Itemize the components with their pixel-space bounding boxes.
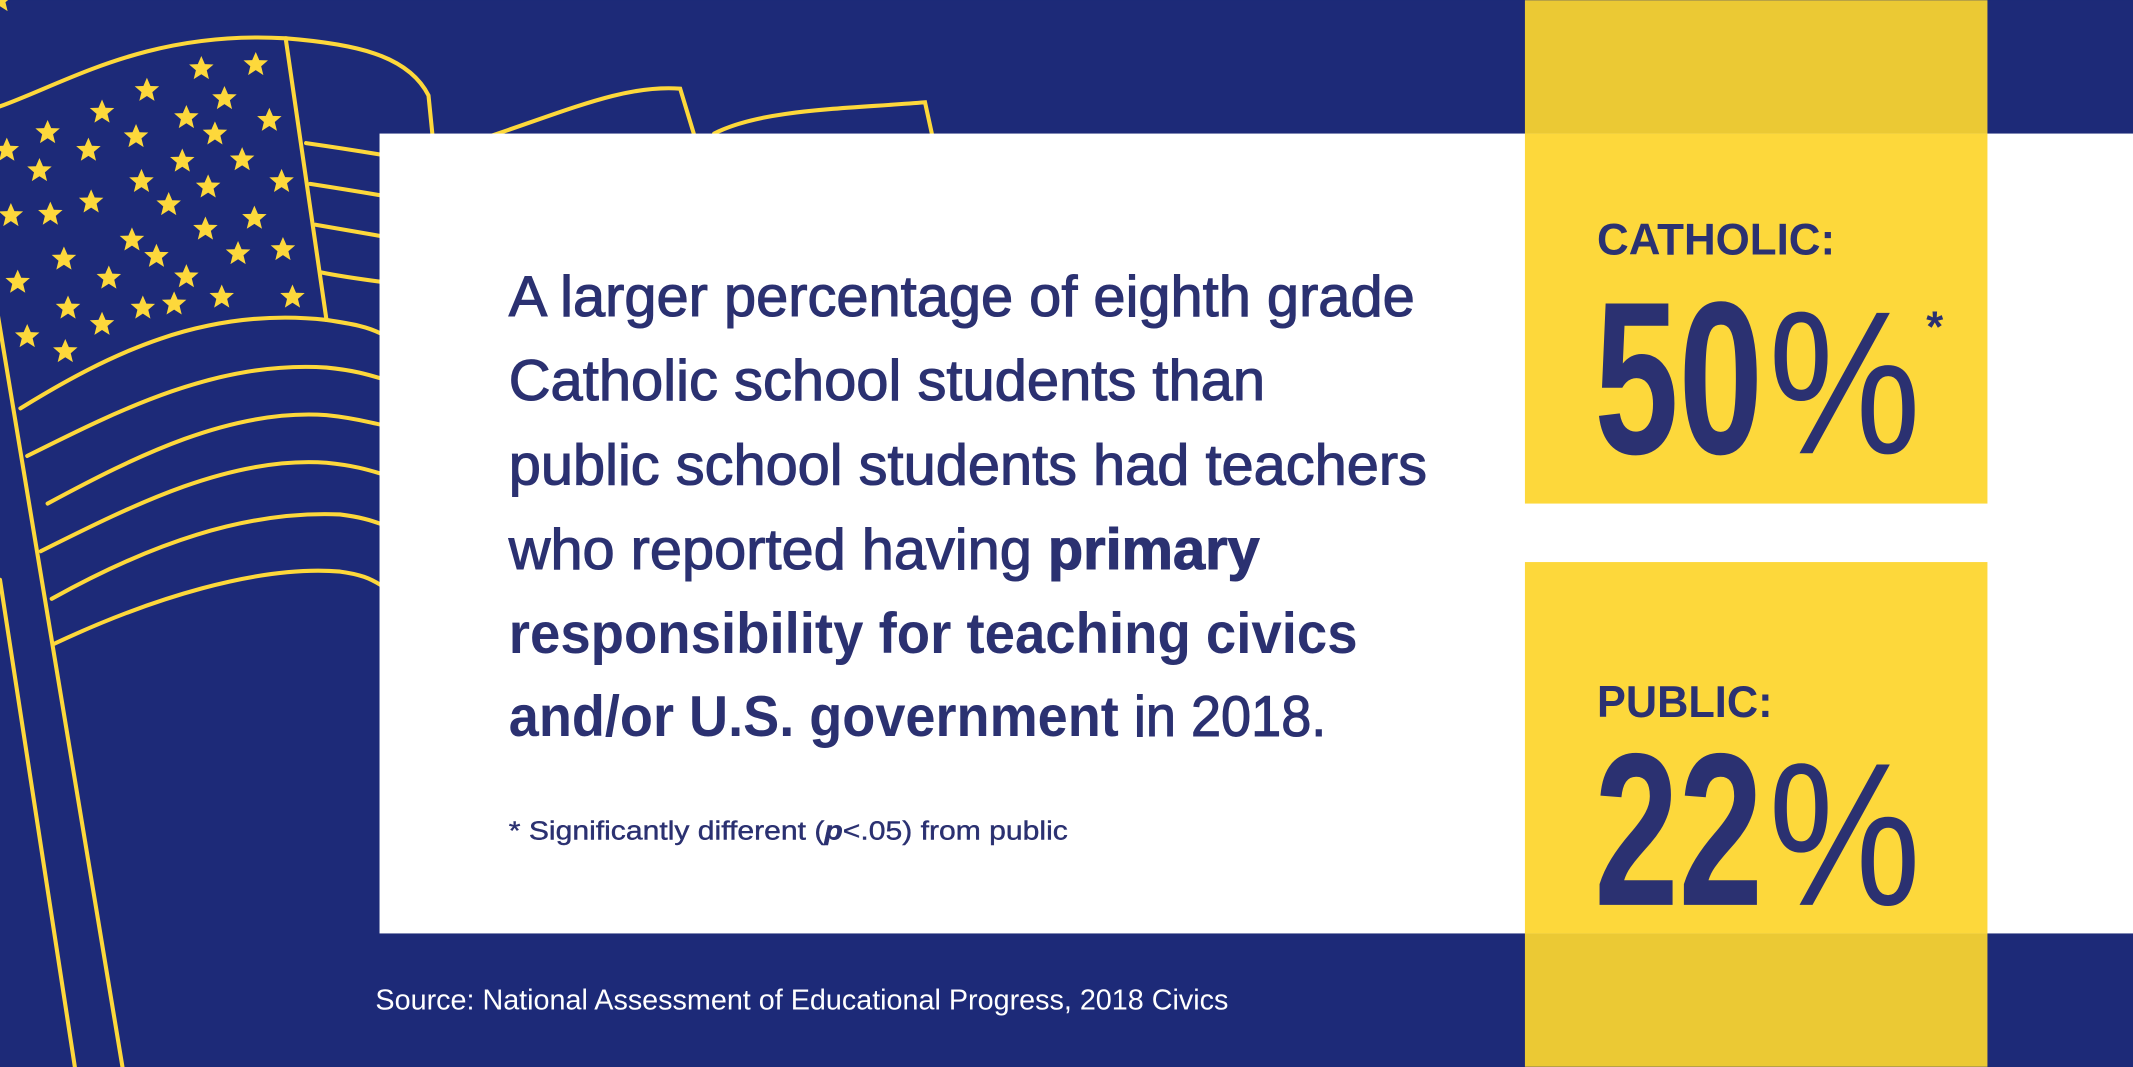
source: Source: National Assessment of Educational Progress, 2018 Civics bbox=[375, 985, 1228, 1017]
panel: public stat bbox=[1525, 562, 1987, 952]
panel: public stat: 22 bbox=[1594, 709, 1763, 952]
footnote: * Significantly different ( p<.05) from public bbox=[509, 818, 1068, 846]
panel: public stat: PUBLIC: bbox=[1597, 676, 1773, 727]
main text block: who reported having primary bbox=[508, 518, 1260, 582]
main text block: responsibility for teaching civics bbox=[509, 602, 1358, 666]
main text block: Catholic school students than bbox=[509, 349, 1265, 413]
panel: public stat: % bbox=[1768, 721, 1921, 949]
panel: white text card bbox=[380, 134, 2133, 933]
panel: catholic stat: % bbox=[1768, 269, 1921, 497]
panel: catholic stat: CATHOLIC: bbox=[1597, 214, 1835, 265]
yellow column top and bottom bbox=[1525, 0, 1987, 1067]
panel: catholic stat: 50 bbox=[1594, 257, 1763, 500]
main text block: public school students had teachers bbox=[509, 434, 1427, 498]
main text block: A larger percentage of eighth grade bbox=[509, 265, 1415, 329]
panel: catholic stat: * bbox=[1926, 304, 1943, 352]
icon: stars bbox=[0, 0, 305, 362]
main text block: and/or U.S. government in 2018. bbox=[509, 685, 1326, 749]
main text block bbox=[508, 265, 1427, 749]
icon: american flag drawing bbox=[0, 37, 932, 1067]
panel: catholic stat bbox=[1525, 134, 1987, 504]
